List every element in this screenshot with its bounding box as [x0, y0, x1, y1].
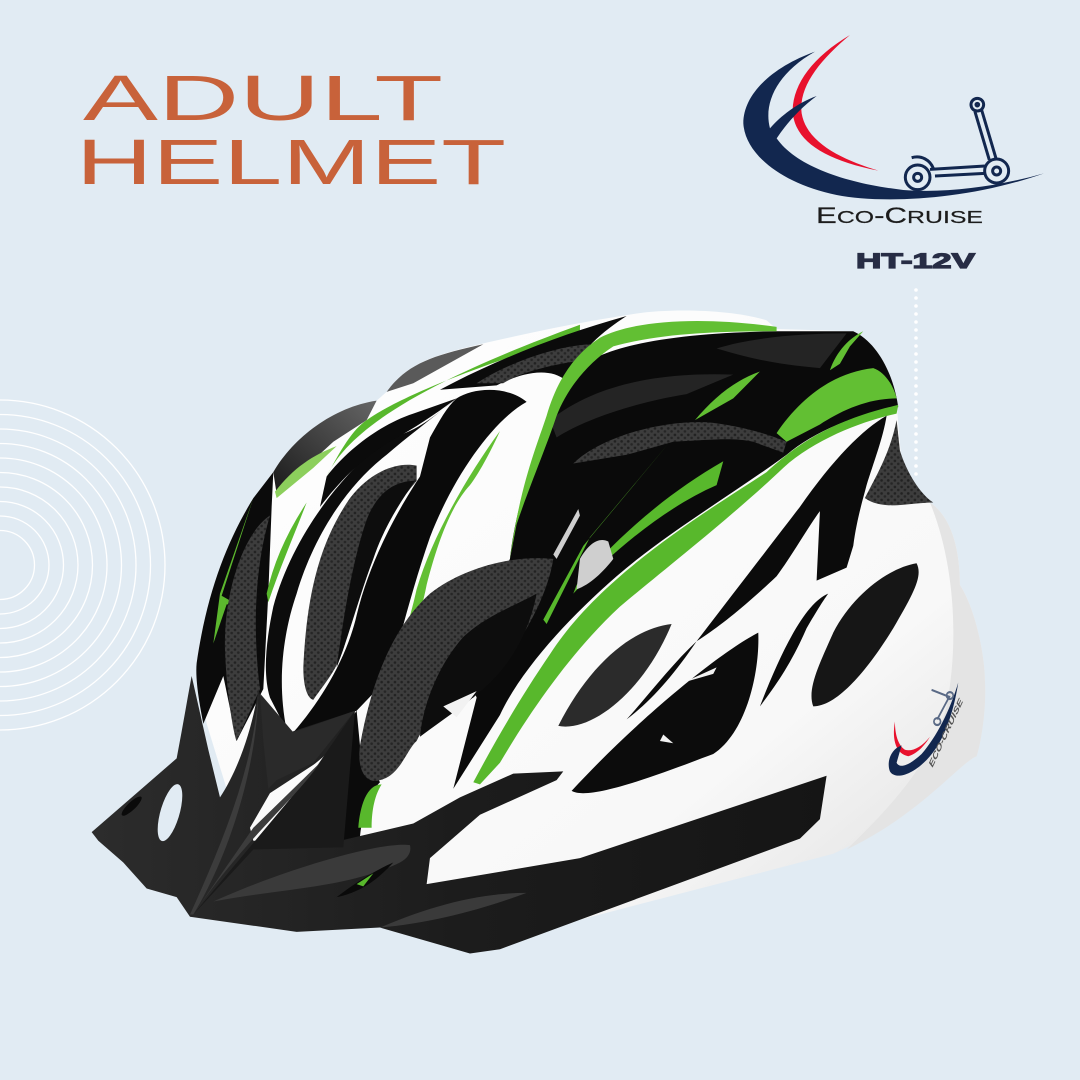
lower black wedge: [267, 711, 380, 845]
visor green glimpse: [357, 873, 373, 886]
visor slot opening: [337, 862, 393, 897]
lower green stripe: [358, 784, 382, 828]
crown carbon strip: [573, 422, 787, 463]
shell logo decal: [889, 682, 964, 776]
central black band: [293, 390, 527, 732]
lower-left green streak: [267, 503, 307, 602]
title: adult helmet: [76, 62, 506, 198]
main green edge stripe: [473, 405, 898, 784]
side vent: rear oval: [811, 563, 919, 706]
middle green stripes: [543, 442, 723, 624]
rear carbon vent: [865, 420, 933, 505]
left black panel: [196, 472, 273, 741]
black streaks on white shell: [627, 416, 887, 719]
black band beside front vent: [266, 398, 457, 730]
visor small slot: [120, 794, 143, 819]
visor front ribs: [190, 693, 320, 917]
top right green stripes: [695, 331, 897, 442]
crown black panel: [453, 331, 898, 789]
visor center piece: [260, 693, 355, 789]
title: adult helmet: ADULT: [83, 62, 443, 134]
gloss reflections: [553, 509, 613, 589]
brand logo: [743, 35, 1044, 228]
black band under upper stripe: [320, 398, 457, 507]
upper green stripe: [327, 325, 580, 476]
top caps: [273, 344, 483, 498]
left green streak: [213, 498, 253, 643]
shell logo decal: ECO-CRUISE: [928, 696, 964, 770]
large carbon vent: [359, 558, 553, 781]
model code: HT-12V: [856, 250, 975, 273]
upper black and carbon ridge: [440, 316, 627, 390]
crown highlights: [550, 333, 847, 437]
logo mark: swoosh and scooter: [743, 35, 1044, 199]
side vent: open: [572, 633, 758, 793]
visor: [92, 676, 827, 954]
title: adult helmet: HELMET: [76, 126, 506, 198]
visor front wedge: [193, 711, 355, 915]
helmet: [92, 310, 985, 954]
visor hole: [153, 780, 187, 845]
logo wordmark: E CO -C RUISE: [816, 203, 983, 228]
visor lower slot: [380, 893, 527, 928]
right side details: [453, 321, 964, 793]
crown green stripe: [510, 321, 777, 559]
rear shell shading: [847, 503, 985, 849]
white shell green stripe: [390, 431, 500, 676]
dotted pointer line: [914, 290, 918, 482]
side vent: sealed oval: [558, 624, 672, 727]
left carbon vent: [225, 516, 270, 741]
front carbon vent: [303, 465, 417, 700]
visor long slot: [213, 845, 410, 902]
decorative concentric circles: [0, 400, 165, 730]
shell base: [197, 310, 985, 941]
